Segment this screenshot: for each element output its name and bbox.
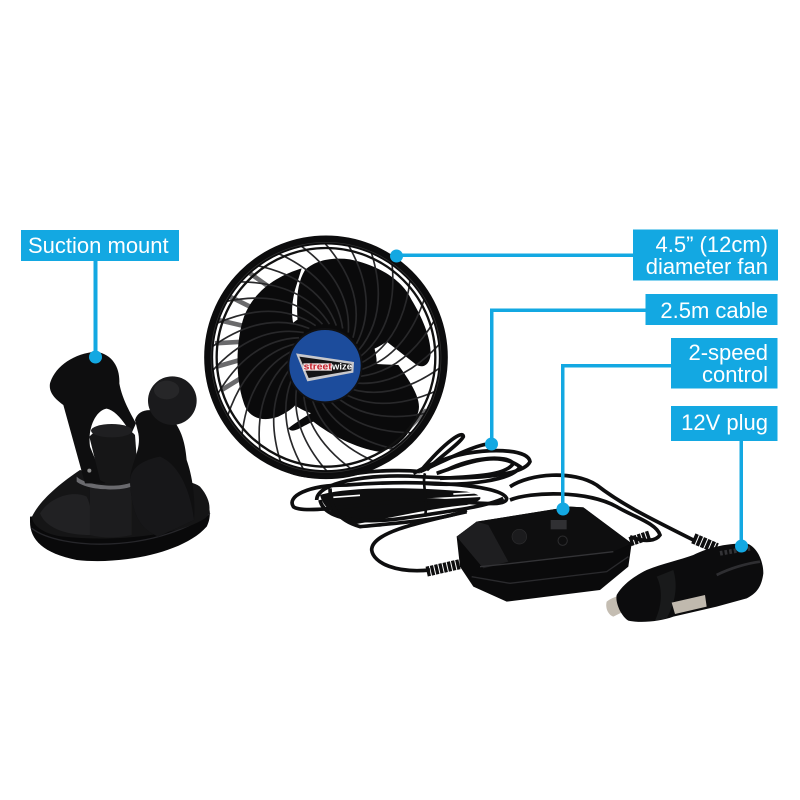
mount arm and pad xyxy=(50,352,136,483)
leader: cable xyxy=(485,308,646,450)
label: fan diameter xyxy=(633,230,778,280)
blade: bottom xyxy=(288,363,419,452)
icon: fan xyxy=(209,240,443,475)
fan hub shadow disc xyxy=(273,312,377,415)
label: 12V plug: 12V plug xyxy=(681,410,768,435)
label: Suction mount: Suction mount xyxy=(28,233,169,258)
fan grille wires xyxy=(211,242,441,473)
label: 2-speed control: 2-speed xyxy=(688,340,768,365)
blade: left xyxy=(238,268,302,419)
icon: 2-speed control box xyxy=(457,507,632,602)
label: 2-speed control: control xyxy=(702,362,768,387)
label: 2-speed control xyxy=(671,338,778,388)
leader: plug xyxy=(735,440,748,552)
cables xyxy=(277,435,717,572)
leader: control xyxy=(556,364,672,516)
streetwize logo: wize xyxy=(331,362,352,372)
blade: top xyxy=(297,259,431,366)
label: fan diameter: 4.5” (12cm) xyxy=(656,232,768,257)
fan hub xyxy=(288,329,362,402)
leader: fan diameter xyxy=(390,250,634,262)
icon: 12V plug xyxy=(606,543,763,622)
label: 2.5m cable xyxy=(646,294,778,325)
icon: suction mount xyxy=(30,352,210,561)
label: 2.5m cable: 2.5m cable xyxy=(660,298,768,323)
leader: suction mount xyxy=(89,260,102,364)
label: 12V plug xyxy=(671,406,778,441)
streetwize logo xyxy=(296,353,354,381)
streetwize logo: street xyxy=(304,362,332,372)
label: fan diameter: diameter fan xyxy=(646,254,768,279)
mount ball arm xyxy=(130,410,194,537)
